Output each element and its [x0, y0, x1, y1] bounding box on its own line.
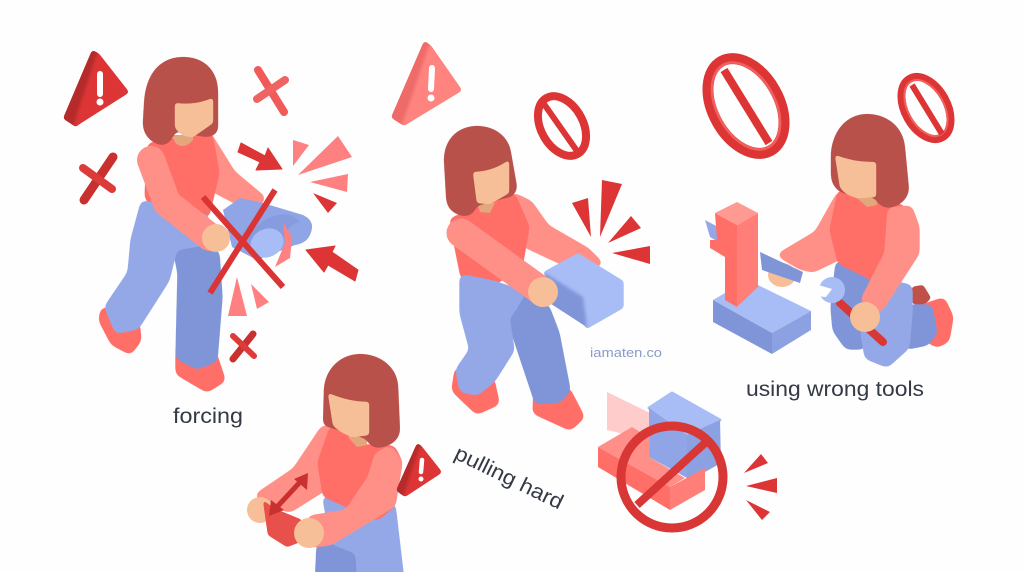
hand	[202, 224, 230, 252]
watermark: iamaten.co	[590, 345, 662, 360]
block structure	[705, 202, 811, 354]
figure: forcing person	[101, 58, 263, 390]
label: forcing: forcing	[173, 405, 243, 428]
red block	[598, 427, 705, 510]
blue tool	[760, 252, 803, 283]
icon: cross top right	[257, 70, 285, 112]
icon: warning triangle light	[393, 43, 460, 124]
blue block	[649, 393, 721, 478]
pink ghost panel	[607, 392, 650, 440]
arrow: top pushing	[238, 143, 282, 170]
figure: person lifting box	[445, 127, 622, 428]
icon: warning triangle small	[398, 445, 440, 495]
figure: kneeling person	[760, 115, 951, 365]
arrow: bottom pushing	[306, 246, 358, 281]
wrench	[815, 277, 883, 342]
panel: using wrong tools	[692, 45, 961, 401]
panel: bottom figure with arrow	[247, 355, 567, 572]
icon: large prohibition sign	[692, 45, 800, 167]
impact burst	[228, 136, 352, 316]
box	[545, 255, 622, 327]
far hand	[768, 263, 796, 287]
panel: forcing	[65, 52, 358, 428]
big red cross	[203, 190, 283, 293]
icon: prohibition sign	[528, 88, 596, 164]
arrow: double headed	[269, 473, 308, 516]
red object	[263, 500, 302, 547]
label: pulling hard: pulling hard	[451, 442, 567, 514]
roll of blue material	[223, 198, 312, 267]
panel: pulling hard figure	[393, 43, 662, 428]
impact burst	[744, 454, 777, 520]
panel: prohibited block	[598, 392, 777, 528]
label: using wrong tools: using wrong tools	[746, 378, 924, 401]
icon: small prohibition sign	[891, 69, 961, 147]
icon: warning triangle	[65, 52, 127, 125]
icon: prohibition circle	[621, 426, 723, 528]
icon: cross bottom	[233, 334, 254, 359]
figure: person bending object	[247, 355, 403, 572]
icon: cross left	[83, 157, 113, 200]
impact burst	[572, 180, 650, 264]
